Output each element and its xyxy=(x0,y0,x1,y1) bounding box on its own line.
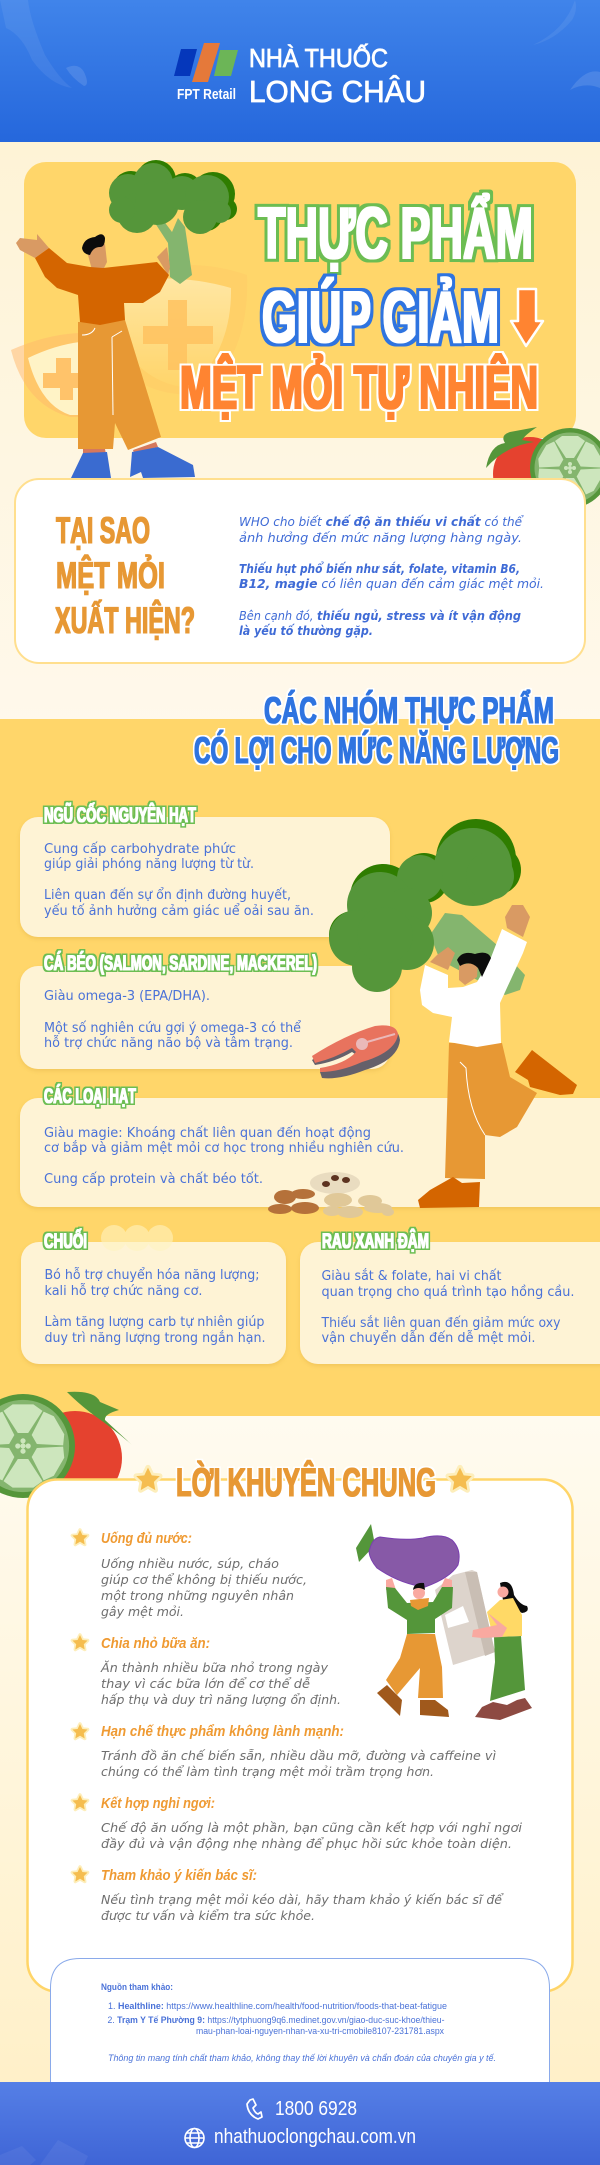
card: nuts: CÁC LOẠI HẠT xyxy=(44,1085,136,1108)
heading: why: MỆT MỎI xyxy=(56,554,165,596)
advice: rest: Chế độ ăn uống là một phần, bạn cũng cần kết hợp với nghỉ ngơi xyxy=(101,1820,523,1835)
text: whole grains: giúp giải phóng năng lượng từ từ. xyxy=(44,857,254,872)
icon: small shield xyxy=(11,333,80,417)
text: whole grains: yếu tố ảnh hưởng cảm giác uể oải sau ăn. xyxy=(44,904,314,919)
advice: water: giúp cơ thể không bị thiếu nước, xyxy=(101,1572,307,1587)
card: banana: CHUỐI xyxy=(44,1229,87,1253)
card: nuts xyxy=(20,1085,600,1207)
icon: banana slices xyxy=(101,1225,173,1251)
illustration: couple with eggplant and milk carton xyxy=(356,1524,532,1720)
text: dark greens: vận chuyển dẫn đến dễ mệt mỏi. xyxy=(322,1331,536,1346)
heading: general advice: LỜI KHUYÊN CHUNG xyxy=(176,1459,436,1505)
panel: references xyxy=(50,1958,550,2083)
character: man holding broccoli xyxy=(16,234,195,478)
advice: water: một trong những nguyên nhân xyxy=(101,1588,294,1603)
text: dark greens xyxy=(321,1269,574,1346)
advice: rest: đầy đủ và vận động nhẹ nhàng để phục hồi sức khỏe toàn diện. xyxy=(101,1836,512,1851)
heading: why: XUẤT HIỆN? xyxy=(55,599,195,641)
brand name: NHÀ THUỐC xyxy=(249,43,388,73)
advice: small meals xyxy=(72,1635,341,1707)
text: why explanation: Thiếu hụt phổ biến như sắt, folate, vitamin B6, xyxy=(239,561,520,576)
advice: rest xyxy=(72,1795,523,1851)
icon: globe xyxy=(185,2128,204,2148)
text: banana: duy trì năng lượng trong ngắn hạn. xyxy=(44,1331,266,1346)
card: whole grains xyxy=(20,803,390,937)
text: fatty fish: Một số nghiên cứu gợi ý omega-3 có thể xyxy=(44,1021,301,1036)
advice: small meals: thay vì các bữa lớn để cơ thể dễ xyxy=(101,1676,310,1691)
footer band xyxy=(0,2082,600,2165)
advice: doctor: được tư vấn và kiểm tra sức khỏe. xyxy=(101,1908,315,1923)
icon: large broccoli xyxy=(329,819,525,995)
icon: tomato and cucumber top right xyxy=(486,427,600,511)
card: banana xyxy=(21,1225,286,1364)
advice: water: Uống đủ nước: xyxy=(101,1530,192,1547)
text: why explanation: WHO cho biết chế độ ăn thiếu vi chất có thể xyxy=(239,514,524,529)
panel: general advice xyxy=(28,1459,572,1992)
text: banana: Bó hỗ trợ chuyển hóa năng lượng; xyxy=(44,1268,260,1283)
text: why explanation: ảnh hưởng đến mức năng lượng hàng ngày. xyxy=(239,530,522,545)
text: fatty fish: Giàu omega-3 (EPA/DHA). xyxy=(44,989,210,1004)
text: dark greens: Thiếu sắt liên quan đến giảm mức oxy xyxy=(321,1316,561,1331)
text: banana: kali hỗ trợ chức năng cơ. xyxy=(44,1284,202,1299)
text: dark greens: Giàu sắt & folate, hai vi chất xyxy=(322,1269,502,1284)
text: why explanation: là yếu tố thường gặp. xyxy=(239,623,373,638)
heading: why xyxy=(55,510,195,641)
advice: small meals: hấp thụ và duy trì năng lượng ổn định. xyxy=(101,1692,341,1707)
advice: limit unhealthy food: chúng có thể làm tình trạng mệt mỏi trầm trọng hơn. xyxy=(101,1764,434,1779)
advice: small meals: Ăn thành nhiều bữa nhỏ trong ngày xyxy=(100,1660,329,1675)
card: dark greens xyxy=(300,1229,600,1364)
advice: small meals: Chia nhỏ bữa ăn: xyxy=(101,1635,210,1652)
panel: references: mau-phan-loai-nguyen-nhan-va-xu-tri-cmobile8107-231781.aspx xyxy=(196,2026,444,2037)
text: why explanation xyxy=(239,514,544,638)
text: nuts xyxy=(44,1126,404,1187)
panel: why tired xyxy=(15,479,585,663)
icon: salmon steak xyxy=(312,1025,400,1078)
icon: large shield xyxy=(120,265,247,394)
advice: limit unhealthy food: Hạn chế thực phẩm không lành mạnh: xyxy=(101,1723,344,1740)
text: nuts: cơ bắp và giảm mệt mỏi cơ học trong nhiều nghiên cứu. xyxy=(44,1141,404,1156)
panel: references: 1. Healthline: https://www.healthline.com/health/food-nutrition/foods-that-beat-fatigue xyxy=(108,2001,447,2012)
character: woman with broccoli xyxy=(329,819,577,1208)
panel: references: 2. Trạm Y Tế Phường 9: https://tytphuong9q6.medinet.gov.vn/giao-duc-suc-khoe/thieu- xyxy=(108,2015,444,2026)
card: fatty fish: CÁ BÉO (SALMON, SARDINE, MACKEREL) xyxy=(44,952,317,975)
text: whole grains: Liên quan đến sự ổn định đường huyết, xyxy=(44,888,291,903)
arrow: down xyxy=(511,289,543,346)
advice: limit unhealthy food: Tránh đồ ăn chế biến sẵn, nhiều dầu mỡ, đường và caffeine vì xyxy=(101,1748,497,1763)
logo: FPT Retail xyxy=(174,43,238,103)
text: banana xyxy=(44,1268,266,1346)
text: dark greens: quan trọng cho quá trình tạo hồng cầu. xyxy=(322,1285,574,1300)
icon: right star xyxy=(448,1468,472,1490)
text: fatty fish: hỗ trợ chức năng não bộ và tâm trạng. xyxy=(44,1036,293,1051)
panel: hero xyxy=(11,160,576,478)
icon: mixed nuts xyxy=(268,1172,394,1218)
advice: rest: Kết hợp nghỉ ngơi: xyxy=(101,1795,215,1812)
yellow section band xyxy=(0,719,600,1416)
text: fatty fish xyxy=(44,989,301,1051)
text: website: nhathuoclongchau.com.vn xyxy=(214,2126,416,2148)
advice: doctor xyxy=(72,1867,504,1923)
icon: phone xyxy=(247,2099,262,2119)
text: banana: Làm tăng lượng carb tự nhiên giúp xyxy=(44,1315,264,1330)
card: fatty fish xyxy=(20,952,390,1069)
advice: water: Uống nhiều nước, súp, cháo xyxy=(101,1556,279,1571)
icon: left star xyxy=(136,1468,160,1490)
brand name xyxy=(249,43,426,109)
text: why explanation: B12, magie có liên quan đến cảm giác mệt mỏi. xyxy=(239,576,544,591)
title xyxy=(180,193,543,421)
advice: doctor: Nếu tình trạng mệt mỏi kéo dài, hãy tham khảo ý kiến bác sĩ để xyxy=(101,1892,504,1907)
panel: references: Nguồn tham khảo: xyxy=(101,1982,173,1993)
advice: water: gây mệt mỏi. xyxy=(101,1604,184,1619)
advice: limit unhealthy food xyxy=(72,1723,497,1779)
text: whole grains: Cung cấp carbohydrate phức xyxy=(44,842,236,857)
icon: broccoli xyxy=(109,160,237,284)
header band xyxy=(0,0,600,142)
card: dark greens: RAU XANH ĐẬM xyxy=(322,1229,429,1253)
panel: references: Thông tin mang tính chất tham khảo, không thay thế lời khuyên và chẩn đoán của chuyên gia y tế. xyxy=(108,2053,496,2064)
brand name: LONG CHÂU xyxy=(249,74,426,109)
text: whole grains xyxy=(44,842,314,919)
heading: why: TẠI SAO xyxy=(56,510,150,551)
advice: doctor: Tham khảo ý kiến bác sĩ: xyxy=(101,1867,257,1884)
heading: general advice xyxy=(136,1459,472,1505)
logo: FPT Retail: FPT Retail xyxy=(177,86,236,103)
text: nuts: Giàu magie: Khoáng chất liên quan đến hoạt động xyxy=(44,1126,371,1141)
text: nuts: Cung cấp protein và chất béo tốt. xyxy=(44,1172,263,1187)
text: why explanation: Bên cạnh đó, thiếu ngủ, stress và ít vận động xyxy=(239,608,521,623)
heading: food groups xyxy=(194,689,559,771)
text: phone number: 1800 6928 xyxy=(275,2098,357,2120)
advice: water xyxy=(72,1530,307,1619)
icon: cucumber and tomato bottom left xyxy=(0,1392,132,1505)
card: whole grains: NGŨ CỐC NGUYÊN HẠT xyxy=(44,803,196,827)
